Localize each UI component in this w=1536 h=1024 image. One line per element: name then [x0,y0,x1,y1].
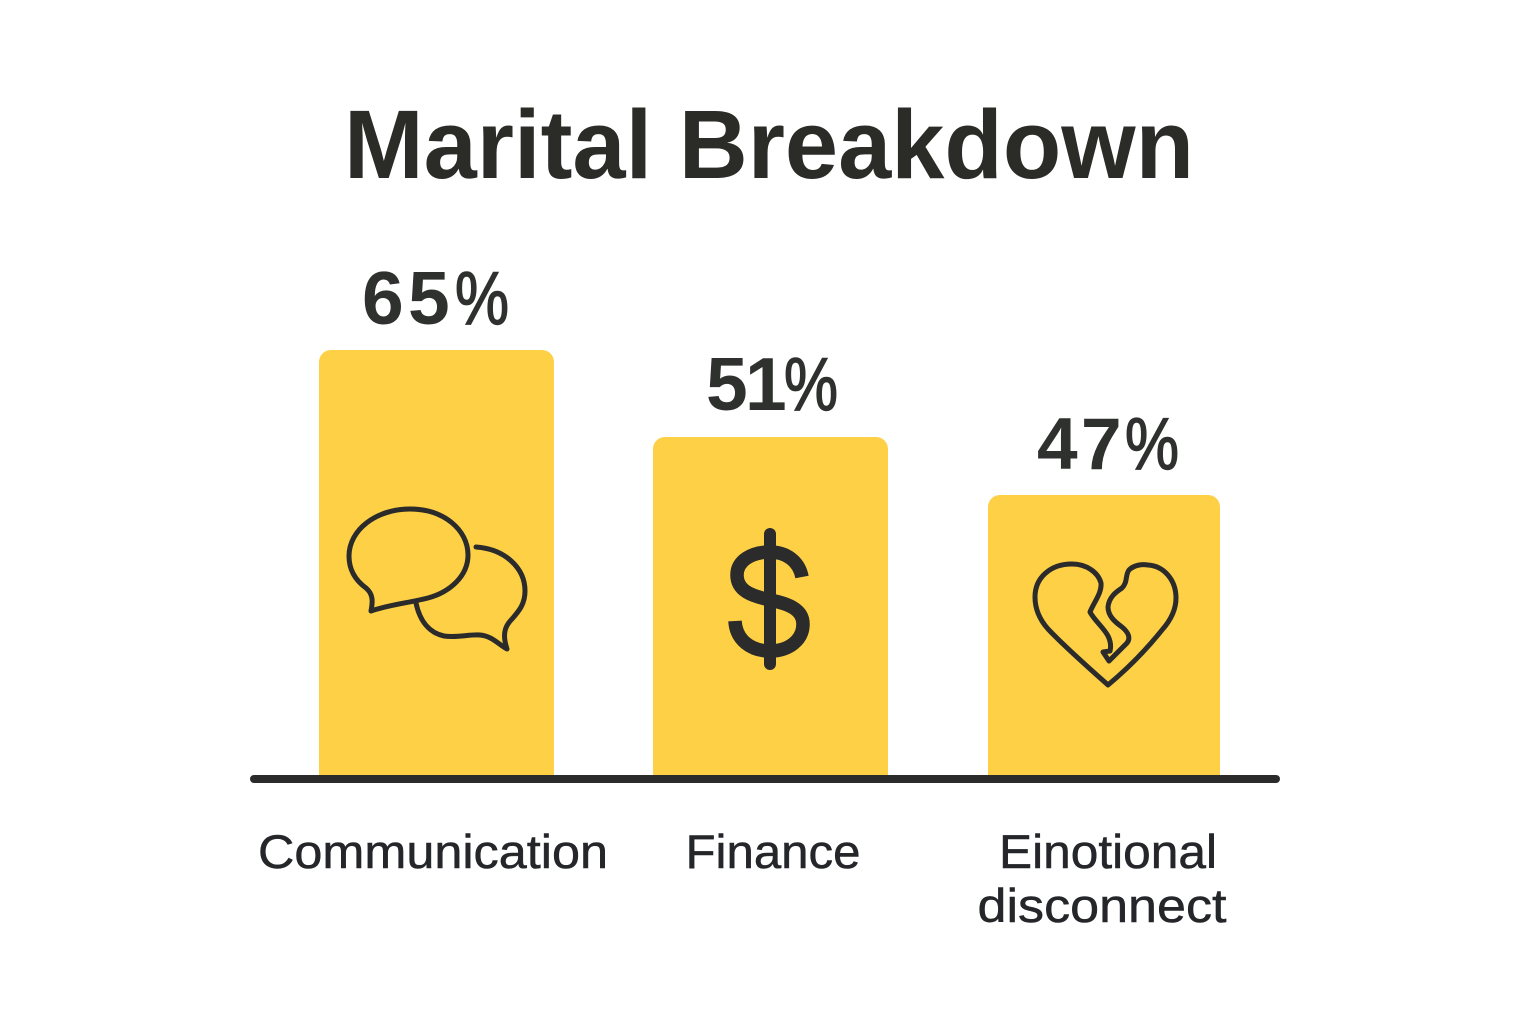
label: emotional disconnect: Einotional [999,825,1217,878]
value: 51%: % [784,342,838,426]
value: 51% [706,342,838,426]
value: 47%: % [1125,404,1179,485]
value: 65% [362,256,509,340]
label: finance: Finance [686,825,860,878]
value: 65%: % [455,256,509,340]
value: 47%: 47 [1037,404,1122,485]
label: communication: Communication [258,825,608,878]
bar: emotional disconnect [988,495,1220,776]
title: Marital Breakdown [344,90,1194,199]
label: emotional disconnect: disconnect [978,879,1226,932]
icon: speech bubbles [349,509,525,649]
icon: broken heart [1035,564,1176,685]
bar: finance [653,437,888,776]
value: 51%: 51 [706,342,787,426]
baseline axis [250,775,1280,783]
value: 65%: 65 [362,256,450,340]
icon: dollar sign [735,534,803,664]
bar: communication [319,350,554,776]
label: emotional disconnect [978,825,1226,932]
value: 47% [1037,404,1179,485]
